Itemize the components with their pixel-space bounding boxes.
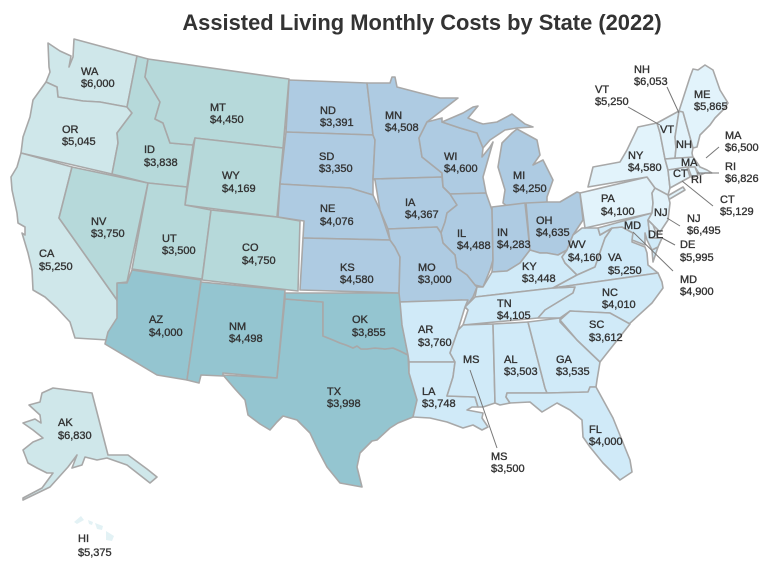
state: AL [493,322,547,405]
label: MO: MO [418,262,436,274]
state: WY [185,138,283,217]
label: OR: OR [62,124,79,136]
label: WA: $6,000 [81,78,115,90]
state: CA [11,153,120,340]
label: CT value: CT [720,194,735,206]
state: HI [74,516,114,541]
label: IA: $4,367 [405,209,439,221]
state: SC [560,311,630,362]
label: GA: $3,535 [556,366,590,378]
label: WY: $4,169 [222,183,256,195]
label: AK: AK [58,417,73,429]
label: NJ value: NJ [687,213,700,225]
state: TX [223,299,417,487]
label: DE value: $5,995 [680,252,714,264]
state: ID [112,56,193,187]
state: NC [538,273,663,325]
label: SD: $3,350 [319,163,353,175]
label: WV: WV [568,239,586,251]
label: AL: AL [504,354,517,366]
label: HI: $5,375 [78,547,112,559]
label: DE value: DE [680,239,695,251]
state: MA [665,157,712,175]
label: LA: LA [422,386,436,398]
state: CT [668,167,690,188]
label: UT: UT [162,233,177,245]
state: AZ [105,270,201,380]
state: SD [280,132,375,195]
label: FL: $4,000 [589,436,623,448]
label: IN: $4,283 [497,239,531,251]
label: RI value: $6,826 [725,173,759,185]
state: IA [373,177,457,233]
state: NY [588,123,670,198]
label: CO: CO [242,242,259,254]
label: IA: IA [405,197,416,209]
state: MI upper [442,106,533,148]
label: MO: $3,000 [418,274,452,286]
label: AR: $3,760 [418,337,452,349]
label: ND: ND [320,105,336,117]
label: OH: $4,635 [536,227,570,239]
label: MD value: MD [680,274,697,286]
label: LA: $3,748 [422,398,456,410]
state: LA [409,362,488,430]
label: SC: $3,612 [589,332,623,344]
label: NM: NM [229,321,246,333]
label: RI value: RI [725,161,736,173]
label: SD: SD [319,151,334,163]
state: UT [132,183,211,279]
map of US states [11,39,728,500]
state: VT [657,111,679,159]
label: CO: $4,750 [242,255,276,267]
label: CA: $5,250 [39,261,73,273]
label: MS value: MS [491,451,508,463]
label: IL: IL [457,228,466,240]
state: CO [202,210,300,291]
state: IL [441,193,493,287]
label: NE: $4,076 [320,216,354,228]
label: WY: WY [222,170,240,182]
label: NV: $3,750 [91,228,125,240]
label: TX: $3,998 [327,398,361,410]
state: MT [145,59,289,148]
state: OH [526,192,583,255]
label: NH state code: NH [676,139,692,151]
label: NH value: NH [634,64,650,76]
state: AR [400,300,468,362]
state: NY Long Island [664,187,685,200]
label: AZ: $4,000 [149,327,183,339]
label: VA: $5,250 [608,265,642,277]
label: VT value: VT [595,84,609,96]
label: VA: VA [608,252,623,264]
state: GA [528,318,600,393]
label: PA: $4,100 [601,206,635,218]
label: WI: $4,600 [444,163,478,175]
label: OK: $3,855 [352,327,386,339]
label: ME: ME [694,89,710,101]
label: ME: $5,865 [694,101,728,113]
label: HI: HI [78,533,89,545]
label: NV: NV [91,216,107,228]
label: GA: GA [556,354,573,366]
state: MD [598,213,662,250]
label: VT value: $5,250 [595,96,629,108]
label: MI: MI [513,170,525,182]
label: NJ value: $6,495 [687,225,721,237]
state: ND [286,80,373,135]
label: CT state code: CT [673,168,688,180]
state: KY [475,250,577,297]
label: FL: FL [589,424,602,436]
label: UT: $3,500 [162,245,196,257]
state: NE [278,184,390,240]
label: NY: NY [628,150,644,162]
state: MN [367,77,458,179]
leader lines [470,87,719,448]
label: IL: $4,488 [457,240,491,252]
label: SC: SC [589,319,604,331]
state: WV [562,228,612,275]
label: MA value: MA [725,130,742,142]
state: IN [492,203,530,272]
label: MN: $4,508 [385,122,419,134]
label: NH value: $6,053 [634,76,668,88]
label: MT: MT [210,102,226,114]
label: MI: $4,250 [513,183,547,195]
label: KY: $3,448 [522,273,556,285]
state: NJ [648,188,670,232]
label: NJ state code: NJ [654,207,667,219]
label: WA: WA [81,66,99,78]
state: TN [463,287,575,325]
label: MD value: $4,900 [680,286,714,298]
state: DE [648,220,658,238]
label: WV: $4,160 [568,252,602,264]
label: VT state code: VT [660,124,674,136]
label: KY: KY [522,261,537,273]
label: TX: TX [327,386,342,398]
label: OR: $5,045 [62,136,96,148]
label: NC: NC [602,287,618,299]
label: WI: WI [444,151,457,163]
label: NM: $4,498 [229,333,263,345]
label: OK: OK [352,314,369,326]
state: MI lower [498,129,553,206]
label: DE state code: DE [648,229,663,241]
state: NM [187,282,285,383]
label: MD state code: MD [624,220,641,232]
state: WI [419,118,493,194]
state: AK [23,388,157,500]
state: OR [21,82,132,174]
label: TN: $4,105 [497,310,531,322]
label: KS: $4,580 [340,274,374,286]
label: CT value: $5,129 [720,206,754,218]
state: PA [580,177,655,228]
state: VA Delmarva tip [652,247,658,262]
title: Assisted Living Monthly Costs by State (2022) [182,10,662,35]
label: KS: KS [340,262,355,274]
label: ID: ID [144,144,155,156]
label: CA: CA [39,248,55,260]
label: MN: MN [385,110,402,122]
label: MT: $4,450 [210,114,244,126]
state: NH [675,111,693,158]
label: MA value: $6,500 [725,142,759,154]
label: MS value: $3,500 [491,463,525,475]
label: NC: $4,010 [602,299,636,311]
state: RI [688,167,698,178]
label: TN: TN [497,298,512,310]
label: MS state code: MS [463,354,480,366]
state: VA [553,227,658,288]
state: ME [679,65,728,148]
label: ND: $3,391 [320,117,354,129]
state: OK [285,293,408,355]
label: AK: $6,830 [58,430,92,442]
state: KS [300,238,400,293]
label: AZ: AZ [149,314,163,326]
label: NE: NE [320,203,335,215]
label: PA: PA [601,193,616,205]
label: OH: OH [536,215,553,227]
state: MS [447,324,495,407]
label: RI state code: RI [691,174,702,186]
label: AL: $3,503 [504,366,538,378]
label: NY: $4,580 [628,162,662,174]
state: MO [388,227,477,308]
state: WA [46,39,137,107]
state: FL [506,387,632,480]
label: ID: $3,838 [144,157,178,169]
state: NV [59,167,148,300]
label: IN: IN [497,227,508,239]
label: AR: AR [418,324,433,336]
label: MA state code: MA [681,157,698,169]
